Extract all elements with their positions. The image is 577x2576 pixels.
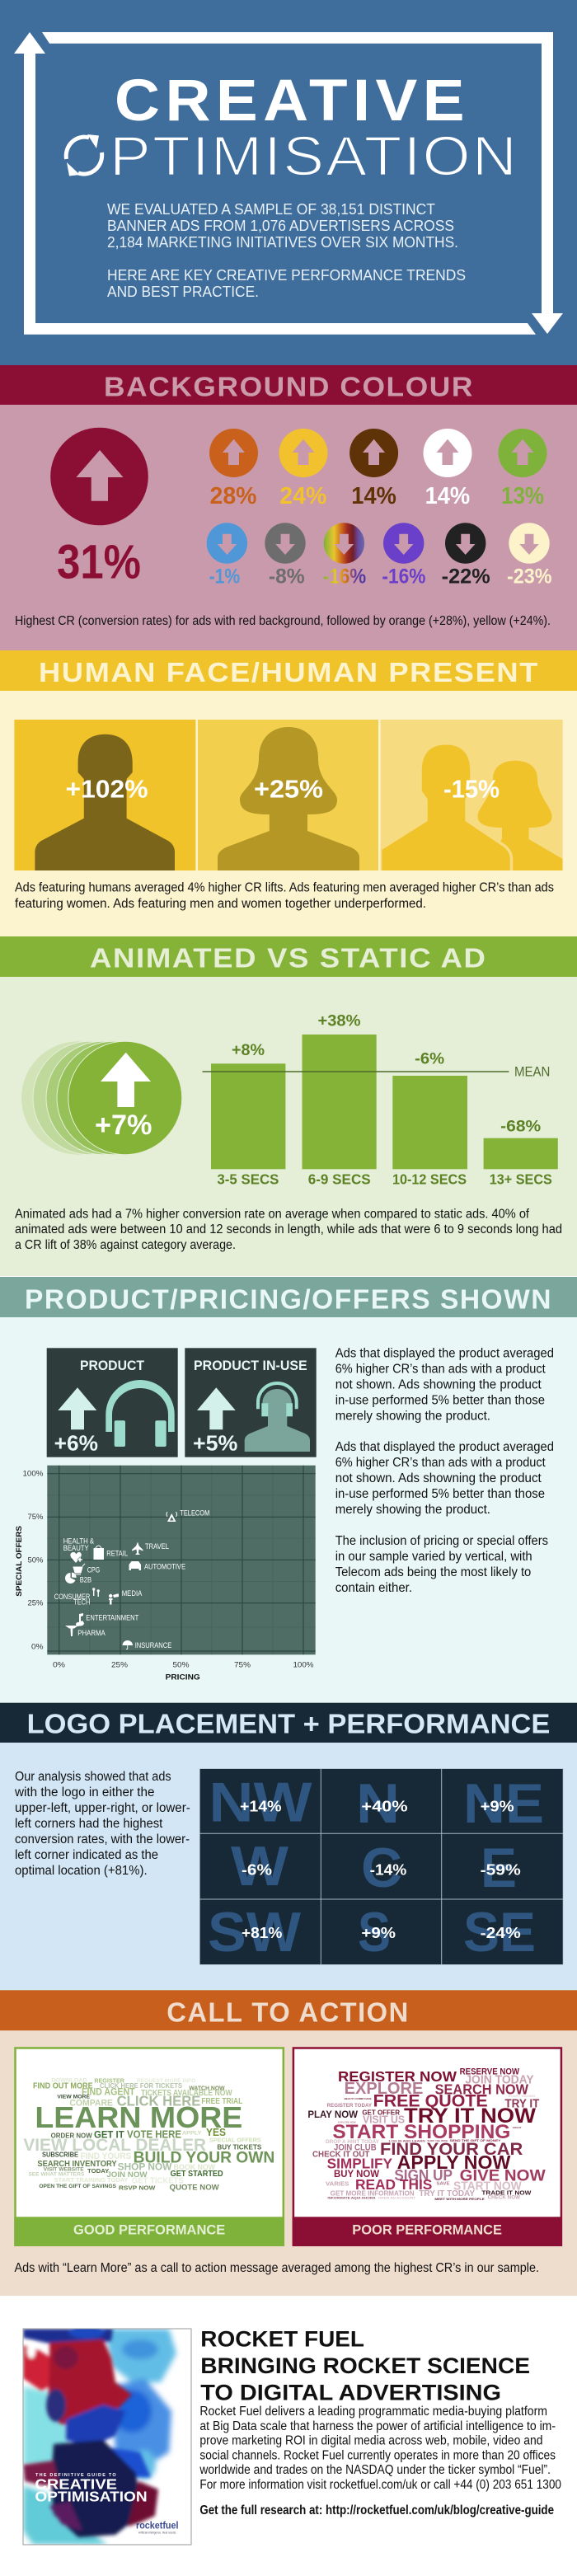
axis labels: 0%	[53, 1660, 66, 1669]
word cloud: poor: TRADE IT NOW	[481, 2189, 532, 2197]
word cloud: good: FIND OUT MORE	[33, 2081, 93, 2090]
bar chart: 3-5 SECS	[217, 1171, 279, 1188]
panel: human face	[0, 650, 577, 936]
word cloud: poor: GIVE NOW	[460, 2168, 546, 2185]
placement grid: -24%	[481, 1924, 521, 1941]
bar chart: -6%	[415, 1050, 444, 1068]
text column: Telecom ads being the most likely to	[335, 1565, 531, 1579]
negative colour circles	[207, 523, 550, 564]
word cloud: poor: GET MORE INFORMATION	[331, 2189, 415, 2198]
positive values: 14%	[351, 483, 396, 509]
word cloud: good: VOTE HERE	[127, 2128, 181, 2140]
intro text	[107, 200, 466, 300]
placement grid: S	[358, 1901, 391, 1964]
placement grid: -14%	[370, 1860, 406, 1878]
word cloud: poor: BEAUTY COMM CARE	[345, 2097, 372, 2100]
card: poor performance: POOR PERFORMANCE	[352, 2222, 502, 2238]
word cloud: good: GET STARTED	[171, 2170, 223, 2179]
placement grid: W	[231, 1835, 289, 1898]
word cloud: good	[23, 2077, 274, 2192]
positive colour circles	[209, 429, 547, 477]
stacked circles with arrow	[21, 1041, 182, 1155]
word cloud: good: DOWNLOAD	[51, 2078, 87, 2084]
book cover	[23, 2325, 191, 2545]
word cloud: good: SPECIAL OFFERS	[209, 2136, 261, 2143]
arrow frame	[14, 32, 563, 335]
word cloud: good: VIEW MORE	[57, 2095, 91, 2100]
word cloud: good: CLICK HERE FOR TICKETS	[100, 2081, 182, 2090]
bar chart: -68%	[500, 1118, 541, 1136]
heading: PRODUCT/PRICING/OFFERS SHOWN	[25, 1284, 552, 1315]
word cloud: good: FREE TRIAL	[201, 2097, 242, 2106]
word cloud: poor: BUY NOW	[334, 2169, 379, 2180]
card: product in-use: +5%	[193, 1430, 237, 1455]
placement grid: -6%	[242, 1860, 272, 1878]
book cover: rocketfuel	[136, 2520, 178, 2531]
header band	[0, 1990, 577, 2030]
word cloud: poor: OPEN AN ACCOUNT	[378, 2196, 416, 2199]
card: product: PRODUCT	[80, 1358, 144, 1373]
word cloud: poor: FREE QUOTE	[373, 2091, 488, 2111]
word cloud: poor: SIGN UP	[394, 2166, 453, 2184]
vertical labels: RETAIL	[106, 1550, 128, 1558]
vertical labels: CONSUMER	[54, 1593, 91, 1601]
word cloud: poor: TRY IT NOW	[404, 2104, 536, 2128]
word cloud: good: FIND YOURS	[81, 2151, 131, 2161]
word cloud: poor: READ THIS	[355, 2176, 432, 2193]
text column: contain either.	[335, 1581, 412, 1595]
footer heading: BRINGING ROCKET SCIENCE	[200, 2353, 530, 2378]
header band	[0, 1277, 577, 1317]
vertical labels: BEAUTY	[63, 1544, 89, 1552]
negative values	[209, 565, 552, 589]
placement grid: SE	[463, 1901, 536, 1964]
word cloud: good: APPLY	[182, 2131, 202, 2137]
negative values: -16%	[382, 565, 425, 589]
word cloud: good: SEE WHAT MATTERS	[28, 2172, 85, 2178]
placement grid	[199, 1769, 563, 1964]
footer body: Rocket Fuel delivers a leading programmatic media-buying platform	[199, 2405, 547, 2419]
card: product in-use: PRODUCT IN-USE	[194, 1358, 307, 1373]
bar chart: 13+ SECS	[490, 1171, 552, 1188]
book cover: OPTIMISATION	[35, 2488, 148, 2504]
intro text: 2,184 MARKETING INITIATIVES OVER SIX MONTHS.	[107, 233, 458, 251]
axis labels: PRICING	[166, 1673, 200, 1682]
book cover: THE DEFINITIVE GUIDE TO	[35, 2473, 116, 2478]
word cloud: good: SEARCH INVENTORY	[37, 2160, 117, 2169]
positive values: 14%	[425, 483, 470, 509]
word cloud: poor: DROP A HINT TODAY	[326, 2140, 379, 2145]
placement grid: +14%	[240, 1798, 282, 1815]
axis labels: 25%	[111, 1660, 129, 1669]
negative values: -8%	[269, 565, 305, 589]
bar chart: 6-9 SECS	[308, 1171, 371, 1188]
panel: rocket fuel footer	[23, 2328, 561, 2546]
text column: merely showing the product.	[335, 1410, 490, 1423]
placement grid: -59%	[481, 1860, 521, 1878]
text block: left corners had the highest	[15, 1817, 163, 1831]
word cloud: good: TICKETS AVAILABLE NOW	[141, 2089, 232, 2098]
bar chart: +8%	[232, 1041, 265, 1059]
word cloud: good: RSVP NOW	[119, 2184, 156, 2192]
footer heading: TO DIGITAL ADVERTISING	[200, 2381, 501, 2405]
text column: Ads that displayed the product averaged	[335, 1347, 554, 1361]
intro text: AND BEST PRACTICE.	[107, 283, 259, 300]
word cloud: good: GET IT	[94, 2128, 124, 2140]
header band	[0, 650, 577, 691]
word cloud: good: JOIN NOW	[106, 2170, 148, 2179]
word cloud: good: QUOTE NOW	[170, 2184, 219, 2192]
card: good performance	[14, 2048, 284, 2246]
word cloud: good: TODAY	[87, 2167, 109, 2175]
text column	[335, 1347, 554, 1595]
scatter chart	[15, 1466, 316, 1682]
placement grid: +40%	[361, 1798, 408, 1815]
text column: not shown. Ads showning the product	[335, 1471, 542, 1485]
negative values: -1%	[209, 565, 240, 589]
word cloud: good: OPEN THE GIFT OF SAVINGS	[39, 2184, 116, 2189]
card: product: +6%	[54, 1430, 98, 1455]
footer body: prove marketing ROI in digital media across web, mobile, video and	[199, 2434, 542, 2448]
vertical labels: TECH	[73, 1598, 90, 1607]
vertical labels: CPG	[87, 1565, 100, 1574]
tile: man: +102%	[66, 774, 148, 803]
stacked circles with arrow: +7%	[95, 1110, 152, 1141]
text column: Ads that displayed the product averaged	[335, 1440, 554, 1454]
panel: intro	[0, 0, 577, 365]
word cloud: poor: APPLY NOW	[397, 2151, 511, 2173]
panel: call to action	[0, 1990, 577, 2296]
axis labels	[15, 1470, 314, 1682]
word cloud: good: REQUEST MORE INFO	[137, 2079, 196, 2084]
footer heading	[200, 2327, 530, 2405]
bar chart: 10-12 SECS	[392, 1171, 467, 1188]
word cloud: good: WATCH NOW	[189, 2085, 225, 2092]
title: creative: CREATIVE	[115, 68, 470, 134]
header band	[0, 365, 577, 405]
placement grid: +81%	[242, 1924, 282, 1941]
word cloud: poor: INFORMATE AQUI AHORA	[327, 2197, 376, 2200]
word cloud: good: START TRAINING TODAY	[54, 2176, 128, 2184]
card: product in-use	[185, 1348, 317, 1457]
word cloud: good: REGISTER	[94, 2077, 125, 2085]
vertical icons	[65, 1512, 176, 1649]
tile: woman: +25%	[254, 774, 323, 803]
bar chart	[203, 1011, 558, 1188]
word cloud: poor: MEET WITH MORE PEOPLE	[434, 2198, 485, 2201]
red value: 31%	[57, 536, 141, 589]
text column: merely showing the product.	[335, 1503, 490, 1517]
word cloud: good: ORDER NOW	[51, 2131, 92, 2139]
word cloud: good: SUBSCRIBE	[42, 2151, 78, 2159]
word cloud: poor: FIND YOUR CAR	[380, 2138, 523, 2159]
word cloud: poor: GET OFFER	[362, 2108, 400, 2116]
placement grid: N	[356, 1772, 400, 1835]
axis labels: 0%	[31, 1643, 44, 1652]
vertical labels: INSURANCE	[135, 1641, 171, 1649]
placement grid: NW	[209, 1771, 312, 1833]
placement grid: NE	[463, 1772, 544, 1835]
placement grid: E	[481, 1837, 517, 1899]
vertical labels: PHARMA	[77, 1629, 106, 1637]
word cloud: poor: START SAVING	[509, 2095, 536, 2098]
word cloud: good: LEARN MORE	[35, 2100, 242, 2134]
word cloud: poor: SIMPLIFY	[327, 2156, 392, 2172]
negative values: -22%	[442, 565, 490, 589]
text column: 6% higher CR’s than ads with a product	[335, 1456, 546, 1470]
word cloud: poor: EXPLORE	[345, 2080, 423, 2098]
intro text: BANNER ADS FROM 1,076 ADVERTISERS ACROSS	[107, 217, 454, 234]
bar chart: MEAN	[514, 1065, 550, 1080]
word cloud: poor: VISIT US	[363, 2114, 405, 2125]
axis labels: 100%	[293, 1660, 314, 1669]
vertical labels: TRAVEL	[145, 1542, 169, 1551]
text column: The inclusion of pricing or special offers	[335, 1534, 548, 1548]
bar chart: +38%	[318, 1011, 361, 1030]
word cloud: poor: REGISTER NOW	[338, 2068, 457, 2085]
vertical labels: ENTERTAINMENT	[86, 1614, 139, 1622]
caption: Animated ads had a 7% higher conversion rate on average when compared to static ads. 40% of	[15, 1207, 530, 1221]
text block: optimal location (+81%).	[15, 1864, 148, 1878]
caption: animated ads were between 10 and 12 seconds in length, while ads that were 6 to 9 seconds long had	[15, 1222, 562, 1236]
header band	[0, 936, 577, 977]
word cloud: good: BOOK NOW	[174, 2163, 216, 2171]
text column: in-use performed 5% better than those	[335, 1487, 545, 1501]
card: poor performance	[293, 2048, 562, 2246]
placement grid: +9%	[361, 1924, 396, 1941]
word cloud: good: SHOP NOW	[118, 2161, 172, 2173]
positive values: 28%	[209, 483, 257, 509]
word cloud: poor: SEND THE GIFT OF MONEY	[450, 2139, 501, 2142]
word cloud: poor: SHOP THE WISH	[427, 2139, 448, 2142]
word cloud: poor: EXPLORE NOW	[338, 2120, 356, 2123]
header band	[0, 1703, 577, 1743]
panel: logo placement	[0, 1703, 577, 1991]
axis labels: 50%	[28, 1556, 44, 1565]
word cloud: poor: RESERVE NOW	[460, 2067, 520, 2077]
word cloud: poor	[307, 2067, 546, 2201]
positive values: 24%	[279, 483, 327, 509]
word cloud: poor: SEARCH NOW	[435, 2081, 529, 2098]
word cloud: poor: GREAT	[513, 2127, 522, 2129]
icon: refresh arrows	[66, 134, 102, 176]
title: optimisation: PTIMISATION	[110, 125, 518, 188]
word cloud: poor: JOIN CLUB	[334, 2142, 377, 2152]
axis labels: 25%	[28, 1599, 44, 1608]
axis labels: 100%	[23, 1470, 44, 1479]
intro text: HERE ARE KEY CREATIVE PERFORMANCE TRENDS	[107, 266, 466, 284]
caption	[15, 1207, 562, 1252]
book cover: Artificial intelligence. Real results.	[138, 2531, 176, 2534]
text column: not shown. Ads showning the product	[335, 1378, 542, 1391]
axis labels: 75%	[28, 1513, 44, 1522]
text block: Our analysis showed that ads	[15, 1770, 171, 1784]
word cloud: poor: LOG IN AND LEARN	[389, 2139, 425, 2142]
caption	[15, 881, 554, 911]
card: product	[47, 1348, 178, 1457]
tile: woman	[198, 720, 378, 870]
text block: left corner indicated as the	[15, 1848, 158, 1862]
caption: featuring women. Ads featuring men and women together underperformed.	[15, 897, 426, 911]
vertical labels: TELECOM	[180, 1509, 209, 1518]
book cover: CREATIVE	[35, 2475, 117, 2492]
word cloud: good: COMPARE	[69, 2098, 113, 2108]
text column: in-use performed 5% better than those	[335, 1393, 545, 1408]
word cloud: good: FIND AGENT	[82, 2086, 135, 2097]
text column: 6% higher CR’s than ads with a product	[335, 1363, 546, 1377]
footer heading: ROCKET FUEL	[200, 2327, 364, 2352]
word cloud: poor: START NOW	[453, 2180, 522, 2193]
word cloud: poor: REGISTER TODAY	[327, 2103, 373, 2109]
text block: with the logo in either the	[14, 1785, 155, 1799]
word cloud: good: BUY TICKETS	[217, 2142, 262, 2151]
word cloud: poor: CHECK NOW	[488, 2196, 520, 2201]
text block	[14, 1770, 190, 1878]
placement grid: +9%	[481, 1798, 514, 1815]
card: good performance: GOOD PERFORMANCE	[73, 2222, 225, 2238]
tile: man and woman	[381, 720, 563, 874]
word cloud: good: CLICK HERE	[117, 2092, 200, 2109]
tile: man	[14, 720, 195, 870]
word cloud: poor: PLAY NOW	[307, 2109, 358, 2120]
word cloud: good: BUILD YOUR OWN	[134, 2149, 274, 2166]
heading: BACKGROUND COLOUR	[104, 373, 474, 403]
word cloud: poor: SAVE	[436, 2182, 450, 2187]
word cloud: poor: START SHOPPING	[332, 2121, 510, 2143]
axis labels: 50%	[173, 1660, 190, 1669]
footer body	[199, 2405, 561, 2492]
axis labels: SPECIAL OFFERS	[15, 1526, 24, 1597]
panel: product pricing offers	[0, 1277, 577, 1703]
panel: animated vs static	[0, 936, 577, 1276]
word cloud: poor: VARIES	[326, 2180, 349, 2187]
intro text: WE EVALUATED A SAMPLE OF 38,151 DISTINCT	[107, 200, 435, 218]
negative values: -16%	[323, 565, 366, 589]
caption: Ads featuring humans averaged 4% higher CR lifts. Ads featuring men averaged higher CR’s than ads	[15, 881, 554, 895]
caption: a CR lift of 38% against category average.	[15, 1238, 236, 1252]
word cloud: poor: TRY IT TODAY	[419, 2189, 475, 2198]
placement grid: C	[361, 1837, 402, 1899]
tile: man and woman: -15%	[443, 774, 500, 803]
text block: upper-left, upper-right, or lower-	[15, 1801, 190, 1815]
text block: conversion rates, with the lower-	[15, 1832, 190, 1846]
vertical labels: MEDIA	[122, 1589, 142, 1598]
caption: Ads with “Learn More” as a call to action message averaged among the highest CR’s in our sample.	[15, 2261, 539, 2275]
vertical labels: AUTOMOTIVE	[144, 1562, 185, 1570]
word cloud: poor: CHECK IT OUT	[312, 2151, 369, 2160]
negative values: -23%	[507, 565, 552, 589]
word cloud: good: YES	[206, 2126, 226, 2138]
panel: background colour	[0, 365, 577, 650]
heading: HUMAN FACE/HUMAN PRESENT	[39, 658, 539, 688]
vertical labels: HEALTH &	[63, 1537, 94, 1546]
word cloud: poor: TRY IT	[504, 2098, 539, 2111]
big red circle with arrow	[50, 428, 148, 525]
axis labels: 75%	[234, 1660, 251, 1669]
placement grid: SW	[208, 1901, 302, 1964]
word cloud: good: VISIT WEBSITE	[44, 2166, 84, 2172]
word cloud: poor: JOIN TODAY	[465, 2073, 534, 2086]
word cloud: good: GET TICKETS	[132, 2176, 184, 2185]
positive values	[209, 483, 544, 509]
text column: in our sample varied by vertical, with	[335, 1550, 532, 1564]
heading: LOGO PLACEMENT + PERFORMANCE	[27, 1710, 550, 1740]
positive values: 13%	[501, 483, 544, 509]
heading: CALL TO ACTION	[167, 1997, 410, 2028]
heading: ANIMATED VS STATIC AD	[90, 943, 487, 974]
vertical labels: B2B	[80, 1576, 91, 1584]
word cloud: good: VIEW LOCAL DEALER	[23, 2134, 206, 2155]
vertical labels	[54, 1509, 209, 1649]
